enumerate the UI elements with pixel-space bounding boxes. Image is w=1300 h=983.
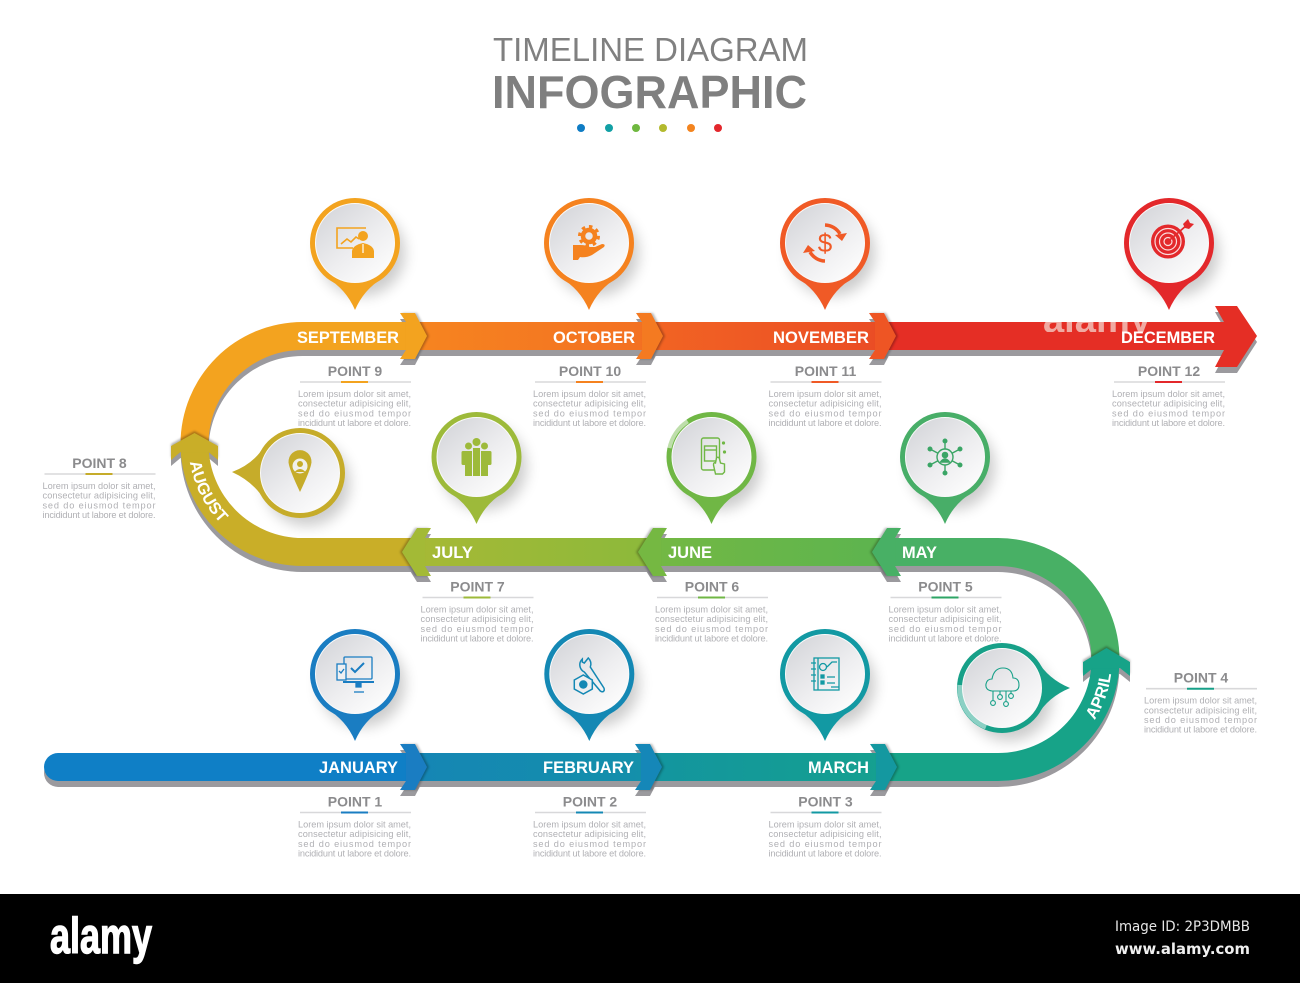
text block: point 8: POINT 8 xyxy=(72,455,127,471)
text block: point 3: sed do eiusmod tempor xyxy=(768,839,882,849)
text block: point 10: Lorem ipsum dolor sit amet, xyxy=(533,389,646,399)
text block: point 6: sed do eiusmod tempor xyxy=(655,624,768,634)
text block: point 7: Lorem ipsum dolor sit amet, xyxy=(420,604,534,614)
icon: gear on hand xyxy=(573,226,605,260)
text block: point 4: incididunt ut labore et dolore. xyxy=(1144,725,1257,735)
label: january: JANUARY xyxy=(319,759,398,777)
pin: april xyxy=(957,643,1070,741)
text block: point 6: POINT 6 xyxy=(685,578,739,594)
text block: point 11: consectetur adipisicing elit, xyxy=(768,399,882,409)
pin: march xyxy=(780,629,875,741)
footer image id: Image ID: 2P3DMBB xyxy=(1115,919,1250,935)
label: october: OCTOBER xyxy=(553,329,635,347)
text block: point 7: POINT 7 xyxy=(450,578,505,594)
text block: point 2: Lorem ipsum dolor sit amet, xyxy=(533,820,646,830)
label: december: DECEMBER xyxy=(1121,329,1215,347)
text block: point 10 xyxy=(533,363,646,428)
title line: infographic: INFOGRAPHIC xyxy=(492,66,807,118)
text block: point 12: Lorem ipsum dolor sit amet, xyxy=(1112,389,1225,399)
text block: point 7: consectetur adipisicing elit, xyxy=(420,614,534,624)
footer url: www.alamy.com xyxy=(1115,940,1250,958)
label: april: APRIL xyxy=(1087,674,1112,720)
ribbon segment: april xyxy=(885,648,1130,781)
pin: september xyxy=(310,198,405,310)
pin: may xyxy=(900,412,995,524)
text block: point 9: Lorem ipsum dolor sit amet, xyxy=(298,389,411,399)
icon: dollar with cycle arrows: $ xyxy=(818,228,833,258)
text block: point 8 xyxy=(42,455,156,520)
text block: point 2: incididunt ut labore et dolore. xyxy=(533,848,646,858)
pin: october xyxy=(544,198,639,310)
ribbon segment: may xyxy=(872,528,1120,660)
icon: presenter with chart xyxy=(337,228,374,258)
text block: point 11: Lorem ipsum dolor sit amet, xyxy=(768,389,882,399)
text block: point 11: sed do eiusmod tempor xyxy=(768,408,882,418)
label: september: SEPTEMBER xyxy=(297,329,399,347)
text block: point 1: POINT 1 xyxy=(328,794,382,810)
pin: august xyxy=(232,428,350,526)
text block: point 1: incididunt ut labore et dolore. xyxy=(298,848,411,858)
text block: point 5: POINT 5 xyxy=(918,578,973,594)
text block: point 12: POINT 12 xyxy=(1138,363,1200,379)
ribbon segment: july xyxy=(402,528,650,576)
text block: point 5: consectetur adipisicing elit, xyxy=(888,614,1002,624)
text block: point 1 xyxy=(298,794,411,858)
text block: point 7 xyxy=(420,578,534,644)
label: march: MARCH xyxy=(808,759,869,777)
text block: point 6: Lorem ipsum dolor sit amet, xyxy=(655,604,768,614)
icon: monitor and phone with checks xyxy=(337,657,374,692)
text block: point 4: sed do eiusmod tempor xyxy=(1144,715,1257,725)
text block: point 5: incididunt ut labore et dolore. xyxy=(888,634,1002,644)
label: august: AUGUST xyxy=(190,462,229,520)
label: may: MAY xyxy=(902,544,937,562)
text block: point 6: incididunt ut labore et dolore. xyxy=(655,634,768,644)
icon: wrench and nut xyxy=(574,658,604,694)
icon: notebook with chart xyxy=(811,658,839,690)
text block: point 8: incididunt ut labore et dolore. xyxy=(42,510,156,520)
text block: point 3: POINT 3 xyxy=(798,794,853,810)
text block: point 6 xyxy=(655,578,768,644)
title colour dots xyxy=(577,124,722,132)
text block: point 4: consectetur adipisicing elit, xyxy=(1144,705,1257,715)
text block: point 3 xyxy=(768,794,882,858)
text block: point 9 xyxy=(298,363,411,428)
text block: point 5: sed do eiusmod tempor xyxy=(888,624,1002,634)
text block: point 12: consectetur adipisicing elit, xyxy=(1112,399,1225,409)
text block: point 7: incididunt ut labore et dolore. xyxy=(420,634,534,644)
text block: point 8: Lorem ipsum dolor sit amet, xyxy=(42,481,156,491)
text block: point 2: POINT 2 xyxy=(563,794,617,810)
icon: cloud with nodes xyxy=(986,668,1019,706)
text block: point 2 xyxy=(533,794,646,858)
month labels xyxy=(190,329,1215,777)
text block: point 12 xyxy=(1112,363,1225,428)
icon: phone with tapping hand xyxy=(702,438,725,474)
text block: point 7: sed do eiusmod tempor xyxy=(420,624,534,634)
text block: point 3: Lorem ipsum dolor sit amet, xyxy=(768,820,882,830)
ribbon segment: december xyxy=(885,306,1257,367)
ribbon segment: october xyxy=(415,313,663,359)
text block: point 1: sed do eiusmod tempor xyxy=(298,839,411,849)
text block: point 2: consectetur adipisicing elit, xyxy=(533,829,646,839)
text block: point 10: consectetur adipisicing elit, xyxy=(533,399,646,409)
text block: point 4 xyxy=(1144,670,1257,735)
pin: january xyxy=(310,629,405,741)
label: july: JULY xyxy=(432,544,473,562)
title line: timeline diagram: TIMELINE DIAGRAM xyxy=(493,31,808,68)
text block: point 11 xyxy=(768,363,882,428)
text block: point 10: POINT 10 xyxy=(559,363,621,379)
ribbon segment: march xyxy=(650,744,897,790)
text block: point 9: POINT 9 xyxy=(328,363,382,379)
label: june: JUNE xyxy=(668,544,712,562)
text block: point 1: consectetur adipisicing elit, xyxy=(298,829,411,839)
text block: point 11: incididunt ut labore et dolore. xyxy=(768,418,882,428)
text block: point 12: incididunt ut labore et dolore. xyxy=(1112,418,1225,428)
pin: february xyxy=(544,629,639,741)
text block: point 3: consectetur adipisicing elit, xyxy=(768,829,882,839)
text block: point 9: consectetur adipisicing elit, xyxy=(298,399,411,409)
text block: point 9: incididunt ut labore et dolore. xyxy=(298,418,411,428)
icon: target with arrow xyxy=(1151,219,1194,258)
text block: point 8: sed do eiusmod tempor xyxy=(42,500,156,510)
label: november: NOVEMBER xyxy=(773,329,869,347)
ribbon grey shadow xyxy=(44,312,1257,796)
icon: three people xyxy=(462,438,492,476)
text block: point 1: Lorem ipsum dolor sit amet, xyxy=(298,820,411,830)
ribbon segment: february xyxy=(415,744,662,790)
ribbon segment: august xyxy=(171,433,415,566)
ribbon segment: june xyxy=(638,528,885,576)
pin: july xyxy=(432,412,526,524)
text block: point 9: sed do eiusmod tempor xyxy=(298,408,411,418)
text block: point 12: sed do eiusmod tempor xyxy=(1112,408,1225,418)
label: february: FEBRUARY xyxy=(543,759,634,777)
text block: point 10: sed do eiusmod tempor xyxy=(533,408,646,418)
text block: point 8: consectetur adipisicing elit, xyxy=(42,491,156,501)
text block: point 4: Lorem ipsum dolor sit amet, xyxy=(1144,696,1257,706)
ribbon segment: january xyxy=(44,744,427,790)
faint watermark trace on december ribbon: alamy xyxy=(1043,299,1151,341)
text block: point 5 xyxy=(888,578,1002,644)
title xyxy=(492,31,808,118)
text block: point 3: incididunt ut labore et dolore. xyxy=(768,848,882,858)
text block: point 6: consectetur adipisicing elit, xyxy=(655,614,768,624)
text block: point 4: POINT 4 xyxy=(1174,670,1228,686)
footer band xyxy=(0,894,1300,983)
icon: map pin with person xyxy=(288,450,312,492)
footer logo: alamy xyxy=(50,908,152,964)
ribbon segment: november xyxy=(650,313,896,359)
icon: network hub xyxy=(928,439,962,475)
pin: june xyxy=(666,412,762,524)
text block: point 5: Lorem ipsum dolor sit amet, xyxy=(888,604,1002,614)
pin: november xyxy=(780,198,875,310)
text block: point 11: POINT 11 xyxy=(795,363,856,379)
text block: point 10: incididunt ut labore et dolore. xyxy=(533,418,646,428)
ribbon segment: september xyxy=(180,313,427,444)
pin: december xyxy=(1124,198,1219,310)
text block: point 2: sed do eiusmod tempor xyxy=(533,839,646,849)
